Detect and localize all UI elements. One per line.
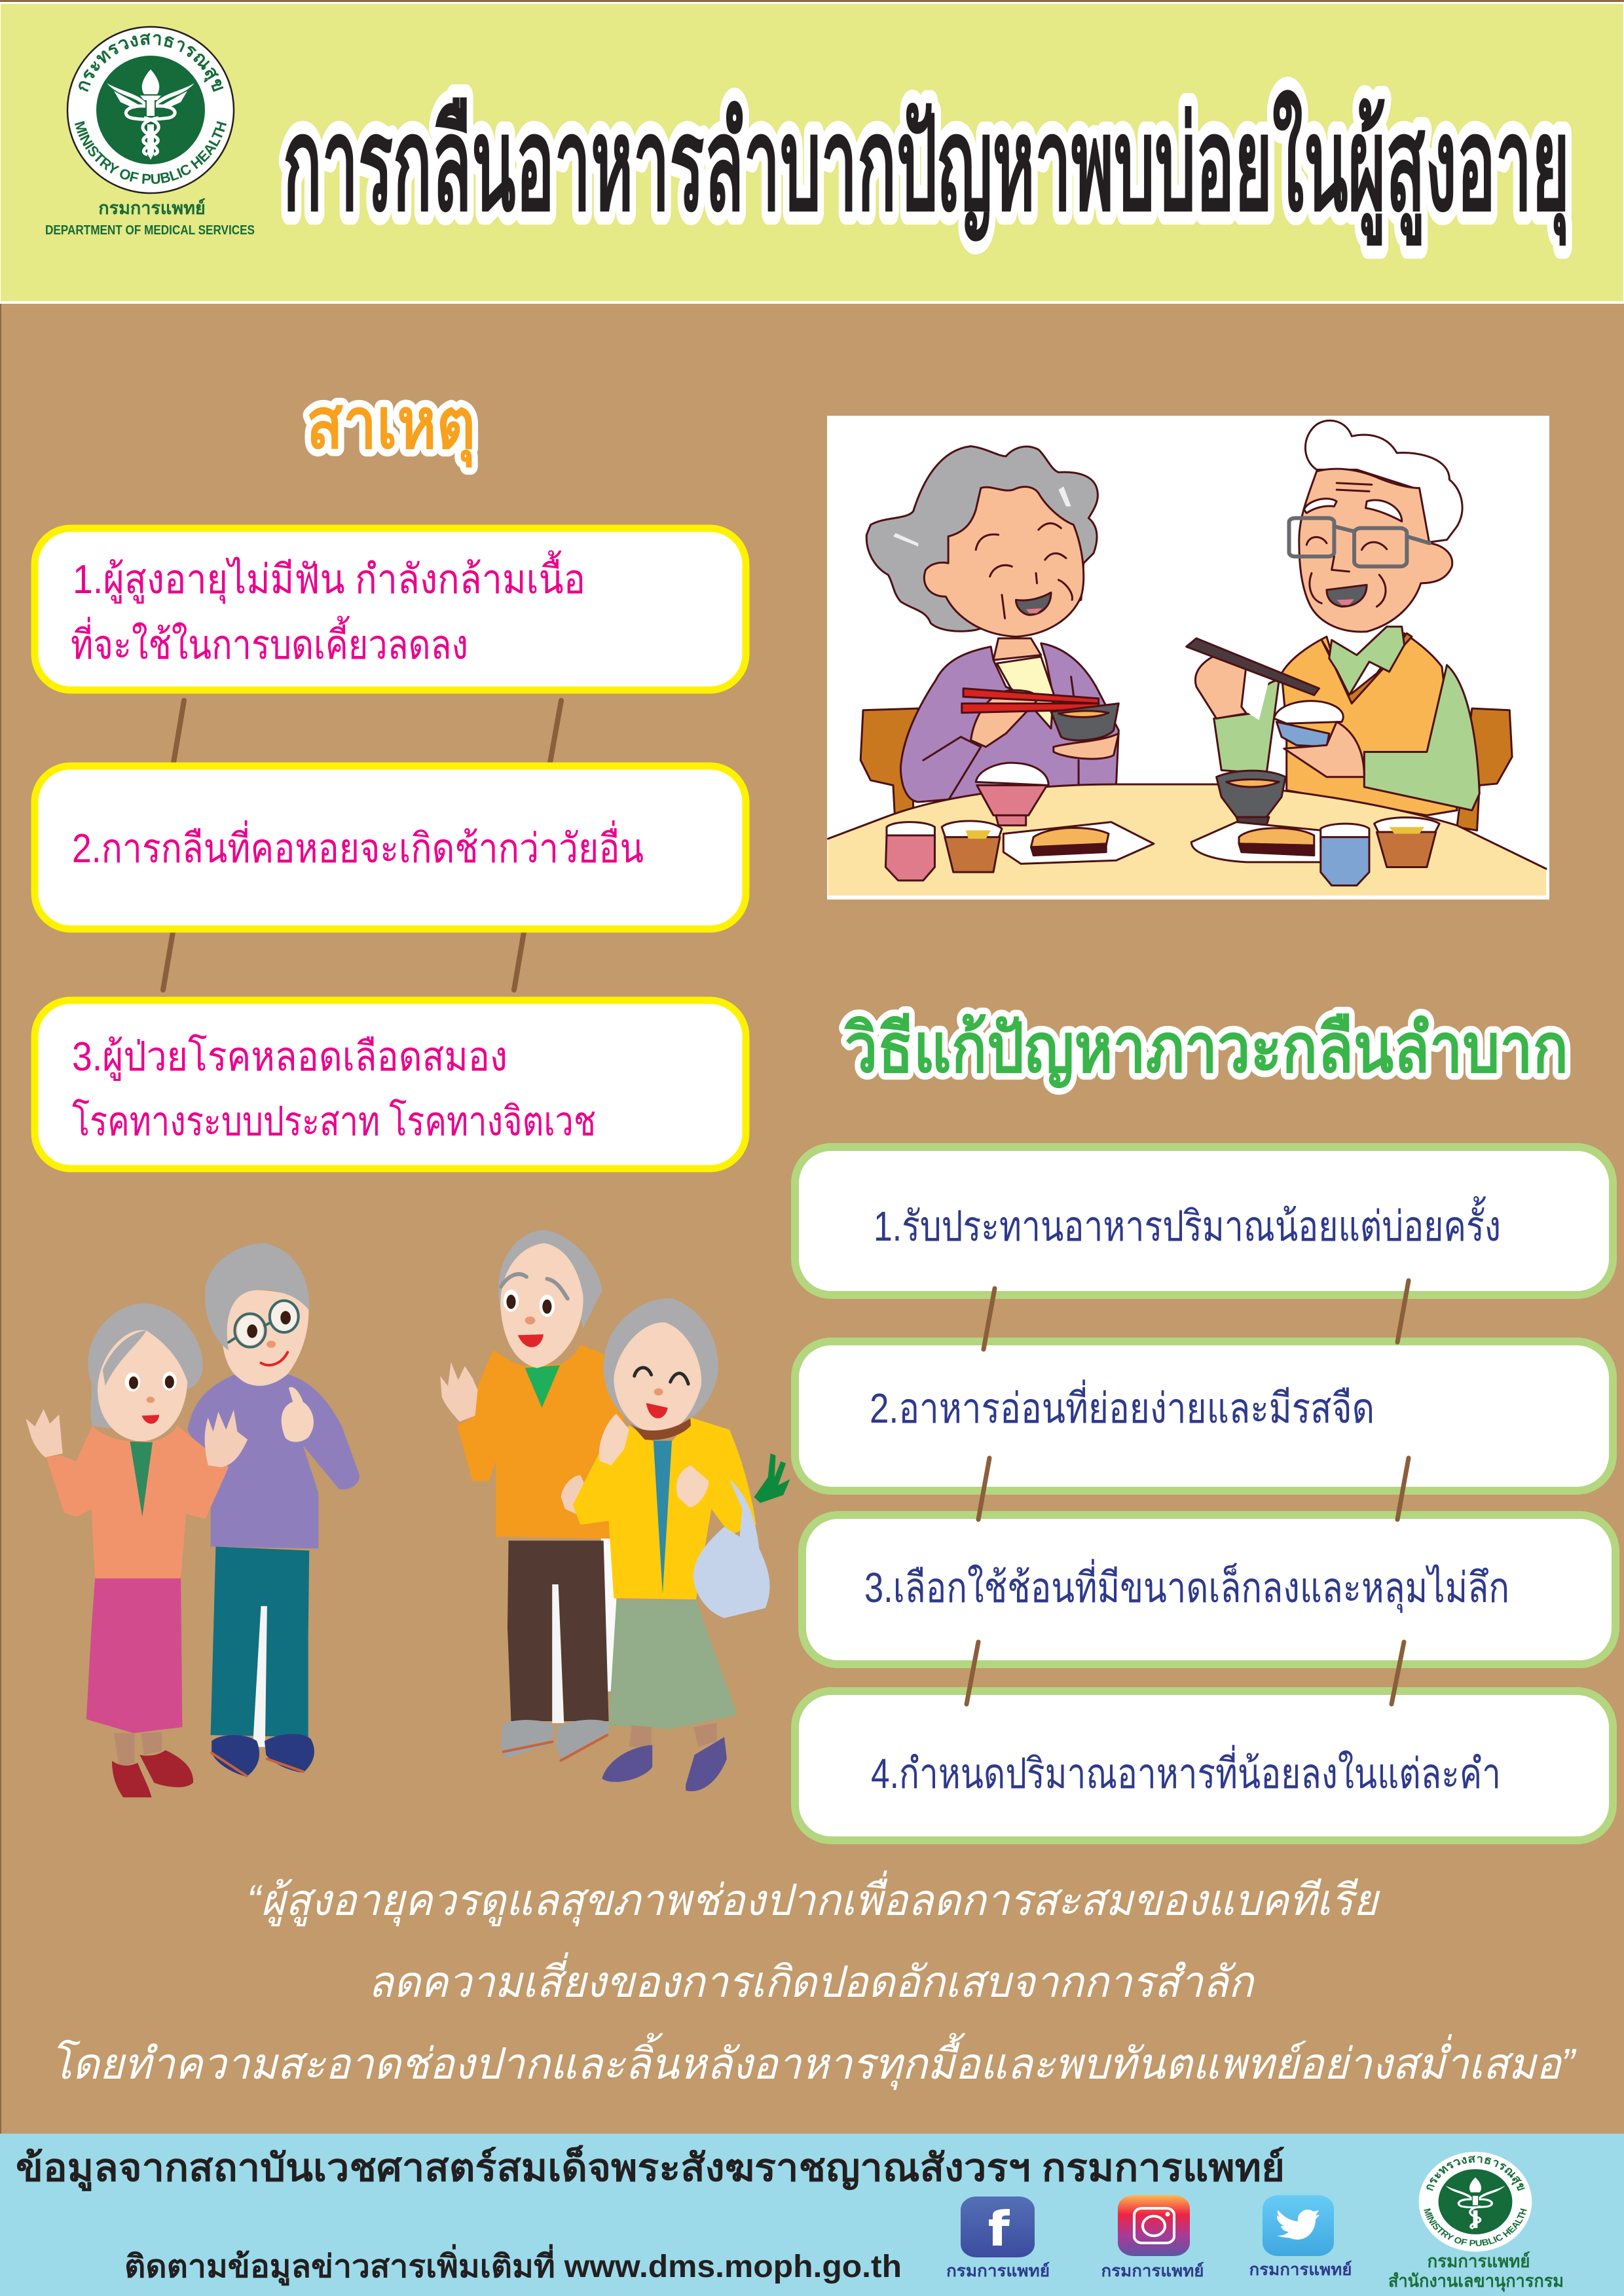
- department name: [45, 198, 255, 238]
- cause 1: ที่จะใช้ในการบดเคี้ยวลดลง: [71, 615, 468, 668]
- man in purple: [187, 1243, 360, 1777]
- footer band: [0, 2134, 1624, 2296]
- woman hair: [866, 446, 1098, 631]
- man in orange: [440, 1230, 624, 1761]
- left chair: [860, 708, 918, 814]
- cause 3: 3.ผู้ป่วยโรคหลอดเลือดสมอง: [72, 1034, 507, 1081]
- quote text: ลดความเสี่ยงของการเกิดปอดอักเสบจากการสำลัก: [368, 1952, 1255, 2006]
- icon: facebook: [946, 2196, 1050, 2280]
- woman hand and chopsticks: [971, 690, 1037, 747]
- panel: causes: [35, 384, 746, 1169]
- quote text: [50, 1870, 1577, 2090]
- man head: [1305, 420, 1462, 543]
- logo: Ministry of Public Health: MINISTRY OF PUBLIC HEALTH: [75, 120, 227, 184]
- quote text: “ผู้สูงอายุควรดูแลสุขภาพช่องปากเพื่อลดการสะสมของแบคทีเรีย: [247, 1870, 1380, 1927]
- website line: ติดตามข้อมูลข่าวสารเพิ่มเติมที่ www.dms.moph.go.th: [124, 2244, 902, 2286]
- solution 4: [795, 1691, 1613, 1840]
- logo: Ministry of Public Health: [67, 26, 234, 194]
- right plate: [1191, 822, 1321, 862]
- cause 1: 1.ผู้สูงอายุไม่มีฟัน กำลังกล้ามเนื้อ: [73, 550, 585, 604]
- icon: twitter: [1249, 2195, 1352, 2279]
- logo: Ministry of Public Health (footer): MINISTRY OF PUBLIC HEALTH: [1424, 2208, 1527, 2246]
- heading: causes: สาเหตุ: [306, 384, 475, 468]
- table: [828, 784, 1546, 896]
- woman body: [993, 638, 1041, 660]
- office name: สำนักงานเลขานุการกรม: [1388, 2271, 1564, 2292]
- left plate: [1003, 822, 1154, 864]
- solution 1: [795, 1147, 1613, 1295]
- solution 2: 2.อาหารอ่อนที่ย่อยง่ายและมีรสจืด: [870, 1379, 1375, 1432]
- connector lines: [967, 1281, 1409, 1704]
- soup bowl dark: [1217, 771, 1285, 817]
- source credit: ข้อมูลจากสถาบันเวชศาสตร์สมเด็จพระสังฆราชญาณสังวรฯ กรมการแพทย์: [16, 2145, 1285, 2191]
- woman in yellow with bag: [573, 1298, 790, 1791]
- man body: [1282, 633, 1457, 815]
- department name: กรมการแพทย์: [98, 198, 206, 218]
- connector lines: [163, 701, 561, 990]
- icon: facebook: กรมการแพทย์: [946, 2261, 1050, 2280]
- woman in peach: [26, 1303, 248, 1797]
- panel: solutions: [795, 1011, 1615, 1840]
- cause 2: 2.การกลืนที่คอหอยจะเกิดช้ากว่าวัยอื่น: [72, 820, 644, 871]
- office name: กรมการแพทย์: [1428, 2251, 1530, 2271]
- logo: Ministry of Public Health (footer): กระทรวงสาธารณสุข: [1426, 2155, 1525, 2191]
- icon: instagram: กรมการแพทย์: [1101, 2261, 1204, 2280]
- solution 2: [795, 1341, 1613, 1491]
- cups: [887, 822, 934, 841]
- icon: instagram: [1101, 2195, 1204, 2280]
- logo: Ministry of Public Health (footer): [1418, 2151, 1532, 2252]
- rice bowl pink: [976, 763, 1048, 785]
- header banner: [0, 2, 1624, 304]
- icon: twitter: กรมการแพทย์: [1249, 2260, 1352, 2279]
- cause 3: โรคทางระบบประสาท โรคทางจิตเวช: [72, 1099, 596, 1144]
- illustration: elderly couple eating: [827, 416, 1549, 900]
- solution 3: [802, 1515, 1615, 1664]
- office name: [1388, 2251, 1564, 2292]
- quote text: โดยทำความสะอาดช่องปากและลิ้นหลังอาหารทุกมื้อและพบทันตแพทย์อย่างสม่ำเสมอ”: [50, 2033, 1577, 2090]
- department name: DEPARTMENT OF MEDICAL SERVICES: [45, 223, 255, 238]
- cause 1: [35, 528, 746, 690]
- cause 2: [35, 766, 746, 929]
- cause 3: [35, 1000, 746, 1169]
- illustration: elderly people standing: [26, 1230, 790, 1797]
- logo: Ministry of Public Health: กระทรวงสาธารณสุข: [79, 33, 224, 92]
